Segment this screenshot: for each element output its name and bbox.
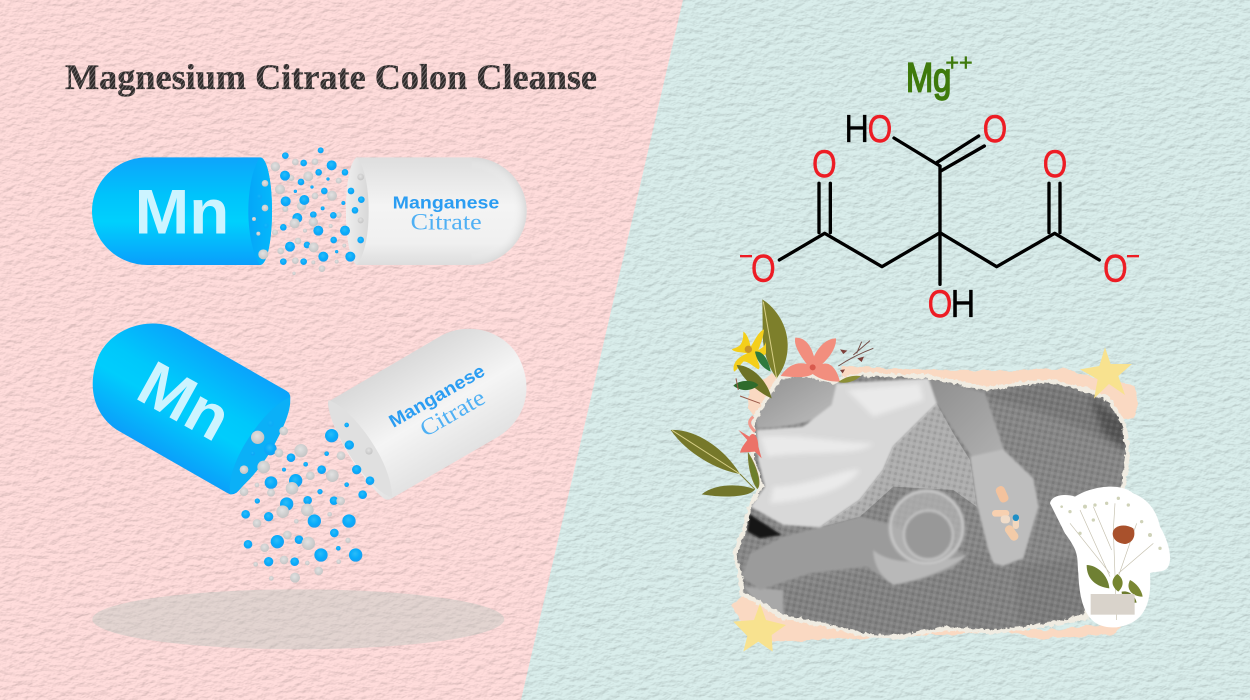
drinking glass (888, 489, 965, 566)
label: Mn: Mn (127, 348, 242, 455)
label: Manganese: Manganese (393, 192, 499, 212)
shoulder skin (753, 373, 840, 428)
sticker: dried flowers (1050, 487, 1170, 627)
rose (1113, 526, 1134, 544)
capsule half: blue (93, 323, 290, 494)
flower: pink hibiscus (781, 338, 840, 382)
magnesium ion label: Mg (906, 55, 951, 101)
open palm (970, 449, 1039, 566)
capsule half: blue (92, 157, 272, 265)
title: Magnesium Citrate Colon Cleanse (65, 57, 597, 97)
open capsule group: Manganese Citrate (bottom) (92, 323, 526, 649)
leaves and flower: left bouquet (671, 417, 762, 496)
leaf: tall olive (762, 299, 788, 378)
citrate structural formula (740, 107, 1139, 326)
torn peach paper (732, 366, 1138, 642)
white sticker backing (1050, 487, 1170, 627)
leaves and flowers: upper left bouquet (732, 299, 873, 403)
atoms: O (1103, 247, 1128, 291)
label: Citrate: Citrate (416, 385, 490, 443)
lower arm holding glass (742, 517, 967, 590)
knitted blanket (727, 370, 1133, 643)
photo collage (671, 299, 1170, 652)
leaf: green (755, 351, 771, 372)
bonds (779, 136, 1099, 284)
label: Citrate: Citrate (411, 210, 482, 236)
star: bottom left (733, 603, 786, 652)
powder particles (240, 420, 374, 583)
atoms: O (1043, 142, 1067, 186)
forearm with open hand (928, 378, 1004, 457)
person: skin, shirt and glass (742, 373, 1039, 618)
flower: yellow (732, 329, 766, 372)
capsule half: white (328, 329, 526, 500)
atoms: O (751, 247, 776, 291)
atoms: H (951, 282, 975, 326)
atoms: O (928, 282, 952, 326)
green leaves (1087, 565, 1109, 588)
stem leaf (740, 453, 759, 489)
leaf: dark green (733, 381, 758, 390)
atoms: O (983, 107, 1007, 151)
leaf: small striped (838, 376, 861, 383)
atoms (740, 107, 1139, 326)
label: Manganese: Manganese (385, 360, 488, 431)
background: teal panel (521, 0, 1250, 700)
label: Mn: Mn (135, 177, 229, 247)
leaf: long olive (737, 365, 772, 398)
bottom left shadow (743, 587, 783, 618)
capsule half: white (346, 157, 527, 265)
flower: coral (738, 430, 762, 458)
star: top right (1080, 347, 1132, 399)
pills in hand (992, 485, 1020, 542)
twig with small red buds (838, 341, 873, 366)
magnesium ion label: ++ (945, 50, 973, 77)
atoms: H (844, 107, 869, 151)
atoms: O (868, 107, 892, 151)
tape (1091, 594, 1135, 615)
sprigs (1070, 503, 1153, 620)
shadow ellipse (92, 589, 504, 649)
closed capsule group: Manganese Citrate (top) (92, 147, 527, 275)
atoms: O (812, 142, 837, 186)
paper edge of photo (732, 372, 1130, 639)
black and white photograph: hands with pills and a glass (727, 370, 1133, 643)
leaf: low olive (702, 485, 755, 496)
powder particles (252, 147, 365, 275)
white t-shirt (751, 378, 937, 527)
leaf: large olive (671, 430, 740, 474)
dark shadow under shirt (747, 514, 782, 538)
